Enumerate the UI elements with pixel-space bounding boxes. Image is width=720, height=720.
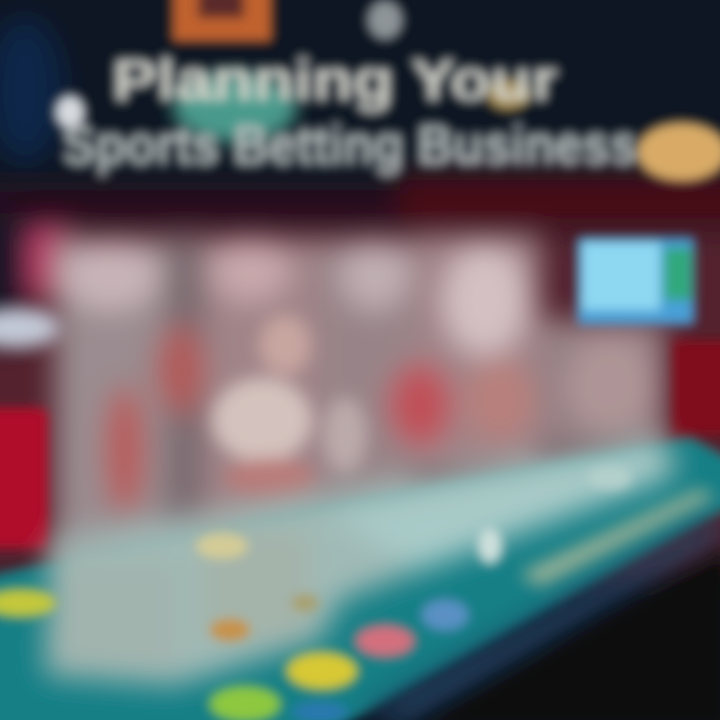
panel row: translucent columns	[25, 225, 665, 565]
title: Sports Betting Business	[62, 113, 638, 176]
title bullet light	[55, 95, 85, 129]
chips: coloured table markers	[0, 466, 632, 720]
side block: left red	[0, 408, 48, 548]
central figure	[212, 315, 367, 498]
gold accent	[486, 79, 530, 111]
table: teal felt	[0, 438, 720, 720]
top decoration: white light	[367, 0, 403, 40]
title	[62, 48, 638, 176]
screen: cyan panel	[578, 238, 694, 324]
side block: right red	[672, 340, 720, 435]
floor: black corner	[410, 545, 720, 720]
table: translucent glass surface	[45, 435, 680, 685]
lamp: gold glow	[636, 122, 720, 182]
left white light	[0, 308, 60, 348]
teal glow behind title	[173, 74, 297, 142]
top decoration: orange emblem	[172, 0, 272, 42]
title: Planning Your	[112, 48, 558, 113]
table edge highlight	[520, 490, 715, 585]
table edge: dark blue rim	[360, 515, 720, 720]
